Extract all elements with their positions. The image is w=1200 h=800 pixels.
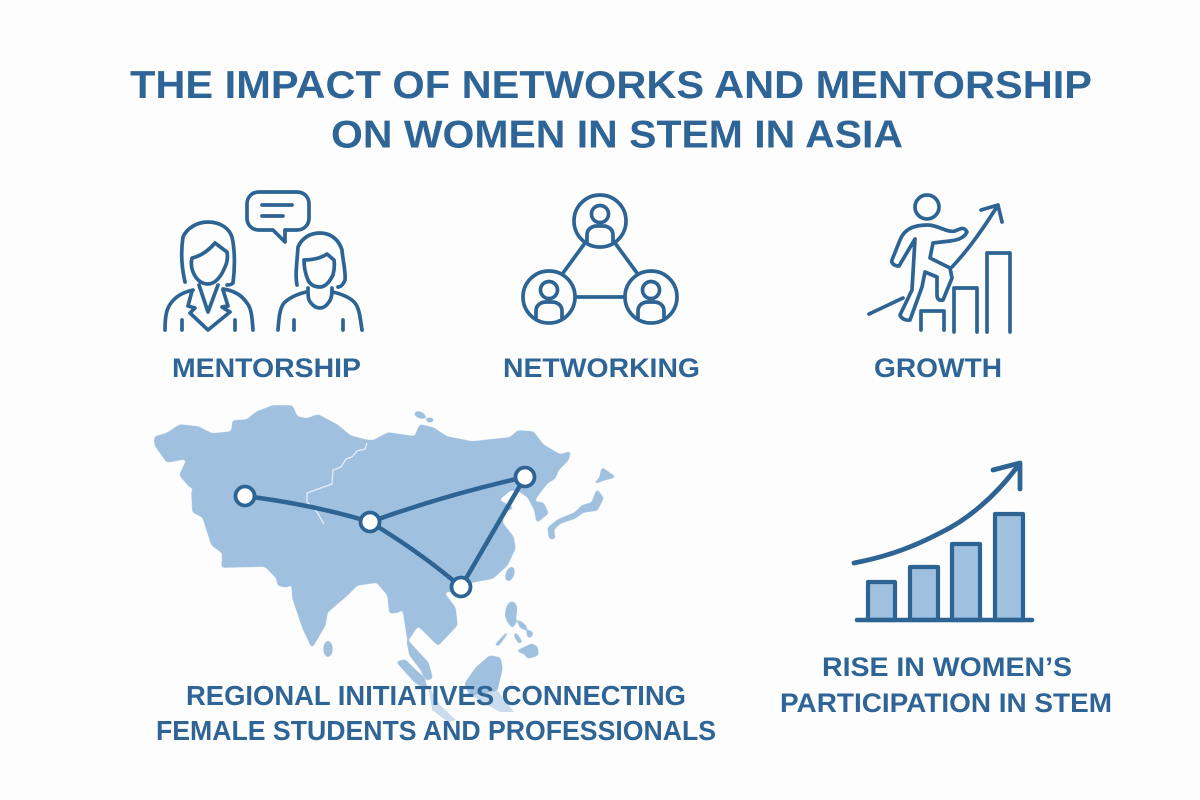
border line <box>307 443 367 524</box>
panel: networking <box>503 195 700 383</box>
label: networking: NETWORKING <box>503 353 700 383</box>
caption: rise in participation: PARTICIPATION IN STEM <box>780 688 1112 718</box>
title <box>130 64 1092 156</box>
label: growth: GROWTH <box>874 353 1002 383</box>
icon: three connected people <box>523 195 677 323</box>
caption: rise in participation <box>780 652 1112 718</box>
panel: mentorship <box>165 192 362 383</box>
caption: regional initiatives: FEMALE STUDENTS AND PROFESSIONALS <box>156 715 716 746</box>
icon: person climbing bars <box>869 195 1010 332</box>
icon: mentor and mentee with speech bubble <box>165 192 362 330</box>
title: ON WOMEN IN STEM IN ASIA <box>331 114 903 156</box>
map of Asia <box>155 406 615 695</box>
title: THE IMPACT OF NETWORKS AND MENTORSHIP <box>130 64 1092 107</box>
network nodes <box>236 468 534 596</box>
panel: rise in participation <box>780 463 1112 718</box>
panel: growth <box>869 195 1010 383</box>
chart: rising bars with arrow <box>854 463 1032 620</box>
fading islands beneath caption <box>428 685 514 722</box>
caption: regional initiatives: REGIONAL INITIATIVES CONNECTING <box>186 680 686 711</box>
caption: regional initiatives <box>156 680 716 746</box>
network routes <box>245 477 525 587</box>
panel: regional initiatives map <box>155 406 716 746</box>
caption: rise in participation: RISE IN WOMEN’S <box>822 652 1072 682</box>
label: mentorship: MENTORSHIP <box>172 353 361 383</box>
